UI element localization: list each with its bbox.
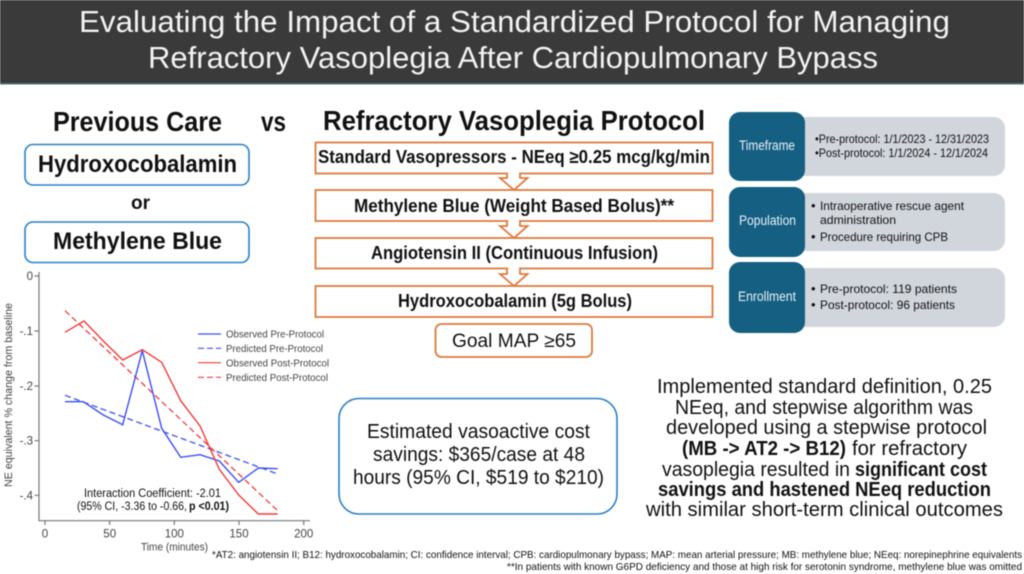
chart legend: Predicted Post-Protocol: [226, 372, 328, 384]
y axis tick labels: 0: [27, 271, 33, 283]
option box: hydroxocobalamin: [25, 144, 249, 185]
row: population: Procedure requiring CPB: [820, 230, 948, 244]
row: enrollment: •: [811, 281, 816, 296]
y axis tick labels: -.3: [20, 436, 33, 448]
series: observed pre-protocol: [65, 351, 278, 482]
option box: methylene blue: Methylene Blue: [53, 228, 222, 255]
step: standard vasopressors: Standard Vasopressors - NEeq ≥0.25 mcg/kg/min: [318, 147, 710, 167]
arrow: step 3 to 4: [500, 268, 528, 286]
row: population: administration: [820, 213, 896, 227]
row: enrollment: [729, 262, 1005, 333]
row: timeframe: •Post-protocol: 1/1/2024 - 12/1/2024: [815, 146, 988, 160]
option box: hydroxocobalamin: Hydroxocobalamin: [38, 151, 237, 178]
goal box: MAP: Goal MAP ≥65: [452, 331, 576, 352]
step: standard vasopressors: [316, 142, 712, 174]
conclusion text: significant cost: [855, 459, 987, 481]
footnotes: [212, 549, 1022, 573]
row: timeframe: •Pre-protocol: 1/1/2023 - 12/31/2023: [815, 132, 989, 146]
conclusion text: for refractory: [852, 438, 967, 460]
goal box: MAP: [436, 324, 592, 357]
arrow: step 2 to 3: [500, 220, 528, 238]
interaction coefficient annotation: [77, 488, 229, 513]
chart legend: Observed Post-Protocol: [226, 358, 329, 370]
interaction coefficient annotation: (95% CI, -3.36 to -0.66,: [77, 501, 187, 513]
step: hydroxocobalamin: [316, 286, 712, 317]
y axis tick labels: -.2: [20, 381, 33, 393]
row: population: Intraoperative rescue agent: [820, 199, 965, 213]
heading: vs: vs: [261, 106, 286, 137]
chart legend: [198, 328, 329, 384]
step: methylene blue: Methylene Blue (Weight Based Bolus)**: [354, 196, 674, 216]
option box: methylene blue: [25, 222, 249, 262]
conclusion text: savings and hastened NEeq reduction: [658, 479, 991, 501]
x axis title: Time (minutes): [141, 542, 208, 554]
row: enrollment: •: [811, 297, 816, 312]
callout: estimated cost savings: hours (95% CI, $519 to $210): [353, 467, 604, 489]
row: enrollment: Enrollment: [738, 289, 796, 304]
conclusion text: (MB -> AT2 -> B12): [682, 438, 846, 460]
row: enrollment: Pre-protocol: 119 patients: [820, 282, 957, 296]
series: observed post-protocol: [65, 321, 278, 514]
interaction coefficient annotation: p <0.01): [189, 501, 229, 513]
row: population: Population: [739, 213, 796, 228]
y axis tick labels: -.4: [20, 490, 34, 502]
step: angiotensin II: [316, 238, 712, 268]
row: timeframe: [729, 112, 1005, 181]
chart legend: Predicted Pre-Protocol: [226, 343, 323, 355]
conclusion text: Implemented standard definition, 0.25: [657, 376, 992, 398]
row: population: •: [811, 229, 816, 244]
conclusion text: NEeq, and stepwise algorithm was: [675, 397, 973, 419]
conclusion text: developed using a stepwise protocol: [666, 417, 987, 439]
title banner: Refractory Vasoplegia After Cardiopulmonary Bypass: [148, 40, 878, 75]
series: predicted post-protocol: [65, 311, 278, 511]
step: hydroxocobalamin: Hydroxocobalamin (5g Bolus): [398, 291, 632, 311]
heading: refractory vasoplegia protocol: Refractory Vasoplegia Protocol: [323, 105, 705, 136]
row: population: •: [811, 198, 816, 213]
callout: estimated cost savings: Estimated vasoactive cost: [367, 421, 590, 443]
panel: previous care: [25, 106, 249, 262]
chart axes: [34, 272, 310, 525]
step: methylene blue: [316, 190, 712, 221]
heading: previous care: Previous Care: [53, 106, 222, 137]
title banner: Evaluating the Impact of a Standardized Protocol for Managing: [79, 4, 950, 39]
row: population: [729, 187, 1005, 257]
y axis tick labels: -.1: [20, 326, 33, 338]
conclusion text: [645, 376, 1003, 521]
text: or: or: [131, 193, 151, 214]
arrow: step 1 to 2: [500, 172, 528, 190]
conclusion text: with similar short-term clinical outcomes: [645, 499, 1003, 521]
title banner: [0, 0, 1024, 84]
step: angiotensin II: Angiotensin II (Continuous Infusion): [371, 243, 658, 263]
x axis tick labels: 200: [294, 528, 313, 540]
x axis tick labels: [42, 528, 313, 540]
panel: study details: [729, 112, 1005, 333]
row: enrollment: Post-protocol: 96 patients: [820, 298, 955, 312]
y axis tick labels: [20, 271, 34, 502]
row: timeframe: Timeframe: [739, 138, 795, 153]
x axis tick labels: 50: [103, 528, 116, 540]
x axis tick labels: 150: [229, 528, 249, 540]
line chart: NE equivalent change over time: [3, 271, 329, 554]
conclusion text: vasoplegia resulted in: [662, 459, 850, 481]
x axis tick labels: 100: [165, 528, 184, 540]
panel: refractory vasoplegia protocol: [316, 105, 712, 357]
callout: estimated cost savings: savings: $365/case at 48: [373, 444, 585, 466]
x axis tick labels: 0: [42, 528, 48, 540]
chart legend: Observed Pre-Protocol: [226, 328, 324, 340]
series: predicted pre-protocol: [65, 395, 278, 474]
interaction coefficient annotation: Interaction Coefficient: -2.01: [84, 488, 221, 500]
callout: estimated cost savings: [339, 398, 617, 514]
y axis title: NE equivalent % change from baseline: [3, 303, 15, 487]
